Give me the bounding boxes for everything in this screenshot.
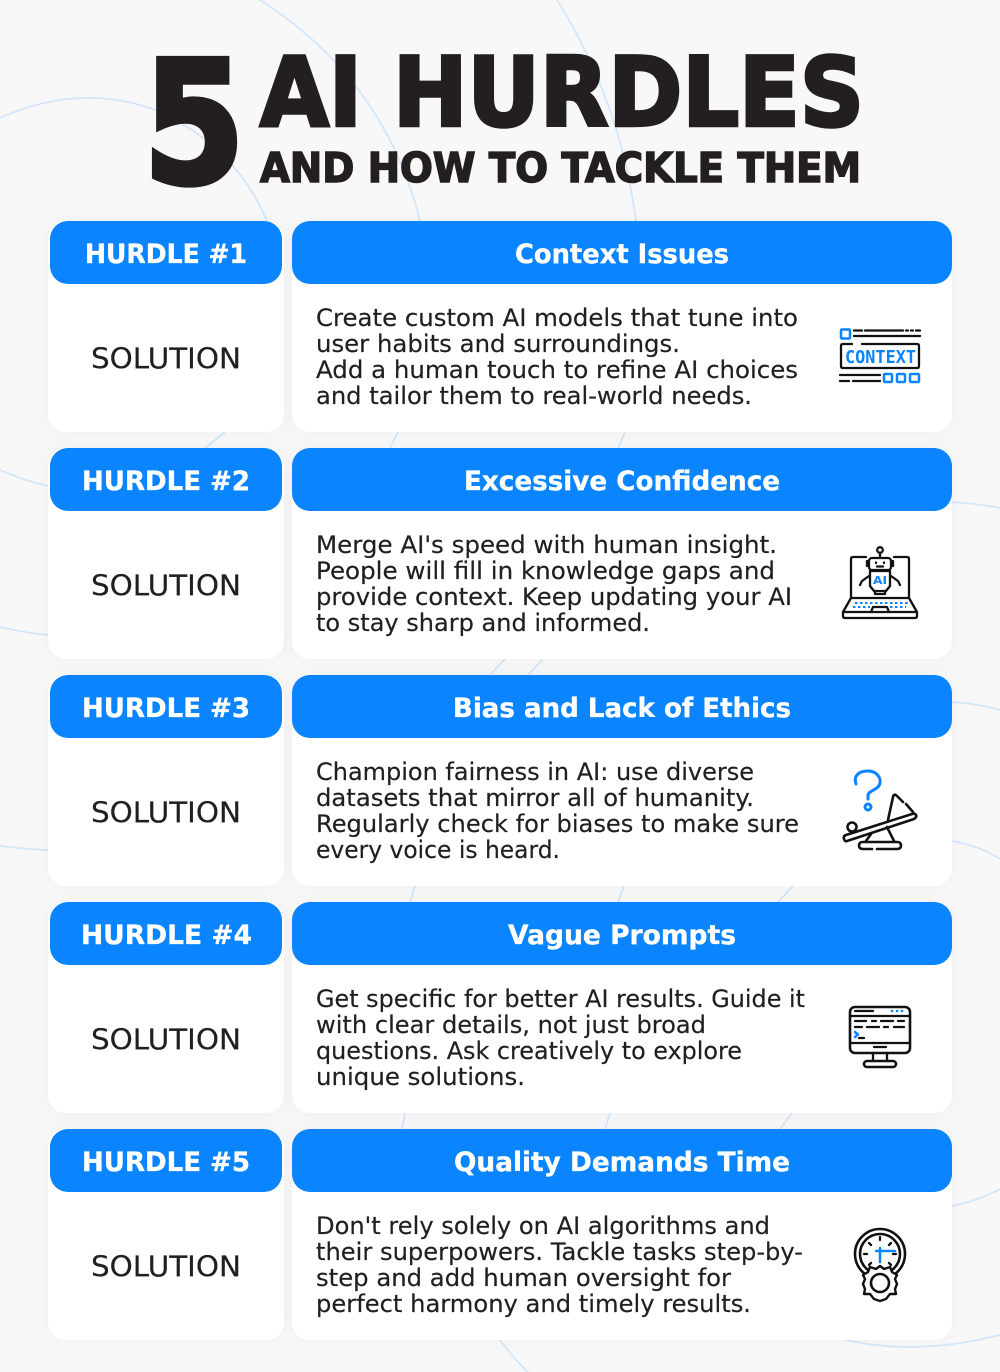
solution text 1: and tailor them to real-world needs. bbox=[316, 382, 752, 410]
solution text 3: Champion fairness in AI: use diverse bbox=[316, 758, 754, 786]
icon: seesaw and question mark bbox=[844, 771, 916, 849]
hurdle 3 heading: Bias and Lack of Ethics bbox=[453, 693, 791, 724]
solution label 5: SOLUTION bbox=[91, 1250, 241, 1284]
solution text 2: provide context. Keep updating your AI bbox=[316, 583, 792, 611]
solution text 3 bbox=[316, 758, 799, 864]
hurdle 1 heading bbox=[292, 221, 952, 284]
hurdle 2 label bbox=[50, 448, 282, 511]
solution text 5: Don't rely solely on AI algorithms and bbox=[316, 1212, 770, 1240]
solution text 4: Get specific for better AI results. Guide it bbox=[316, 985, 805, 1013]
title bbox=[143, 26, 864, 224]
solution text 3: datasets that mirror all of humanity. bbox=[316, 784, 754, 812]
icon: context: CONTEXT bbox=[845, 347, 916, 368]
solution text 4: questions. Ask creatively to explore bbox=[316, 1037, 742, 1065]
solution text 5: step and add human oversight for bbox=[316, 1264, 731, 1292]
panel: hurdle 1 bbox=[48, 221, 952, 432]
icon: context bbox=[840, 330, 920, 382]
solution text 3: every voice is heard. bbox=[316, 836, 560, 864]
hurdle 2 label: HURDLE #2 bbox=[82, 466, 250, 497]
solution text 2: People will fill in knowledge gaps and bbox=[316, 557, 775, 585]
hurdle 4 label bbox=[50, 902, 282, 965]
icon: monitor with prompt bbox=[850, 1007, 910, 1067]
hurdle 5 label bbox=[50, 1129, 282, 1192]
solution text 4: unique solutions. bbox=[316, 1063, 525, 1091]
solution text 4 bbox=[316, 985, 805, 1091]
solution label 2: SOLUTION bbox=[91, 570, 241, 602]
icon: robot on laptop: AI bbox=[873, 574, 887, 587]
solution label 1: SOLUTION bbox=[91, 342, 241, 376]
solution text 2: to stay sharp and informed. bbox=[316, 609, 650, 637]
hurdle 2 heading: Excessive Confidence bbox=[464, 466, 780, 497]
solution text 2 bbox=[316, 531, 792, 637]
hurdle 4 heading: Vague Prompts bbox=[508, 920, 736, 951]
solution label 3: SOLUTION bbox=[91, 796, 241, 830]
solution text 5 bbox=[316, 1212, 803, 1318]
solution text 5: perfect harmony and timely results. bbox=[316, 1290, 751, 1318]
hurdle 3 label: HURDLE #3 bbox=[82, 693, 250, 724]
hurdle 1 label bbox=[50, 221, 282, 284]
icon: robot on laptop bbox=[843, 547, 917, 618]
solution text 5: their superpowers. Tackle tasks step-by- bbox=[316, 1238, 803, 1266]
hurdle 5 heading: Quality Demands Time bbox=[454, 1147, 790, 1178]
panel: hurdle 4 bbox=[48, 902, 952, 1113]
hurdle 4 label: HURDLE #4 bbox=[81, 920, 252, 951]
solution text 4: with clear details, not just broad bbox=[316, 1011, 706, 1039]
panel: hurdle 5 bbox=[48, 1129, 952, 1340]
hurdle 3 heading bbox=[292, 675, 952, 738]
solution text 1: Create custom AI models that tune into bbox=[316, 304, 798, 332]
solution label 4: SOLUTION bbox=[91, 1024, 241, 1056]
solution text 1: user habits and surroundings. bbox=[316, 330, 680, 358]
solution text 2: Merge AI's speed with human insight. bbox=[316, 531, 777, 559]
solution text 1 bbox=[316, 304, 798, 410]
icon: clock and gear bbox=[855, 1229, 905, 1301]
subtitle: AND HOW TO TACKLE THEM bbox=[260, 144, 861, 192]
solution text 1: Add a human touch to refine AI choices bbox=[316, 356, 798, 384]
panel: hurdle 3 bbox=[48, 675, 952, 886]
hurdle 1 heading: Context Issues bbox=[515, 239, 729, 270]
title line: AI HURDLES: AI HURDLES bbox=[260, 38, 864, 148]
hurdle 1 label: HURDLE #1 bbox=[85, 239, 247, 270]
hurdle 4 heading bbox=[292, 902, 952, 965]
panel: hurdle 2 bbox=[48, 448, 952, 659]
title numeral 5: 5 bbox=[143, 26, 245, 224]
hurdle 5 heading bbox=[292, 1129, 952, 1192]
solution text 3: Regularly check for biases to make sure bbox=[316, 810, 799, 838]
hurdle 5 label: HURDLE #5 bbox=[82, 1147, 250, 1178]
hurdle 3 label bbox=[50, 675, 282, 738]
hurdle 2 heading bbox=[292, 448, 952, 511]
